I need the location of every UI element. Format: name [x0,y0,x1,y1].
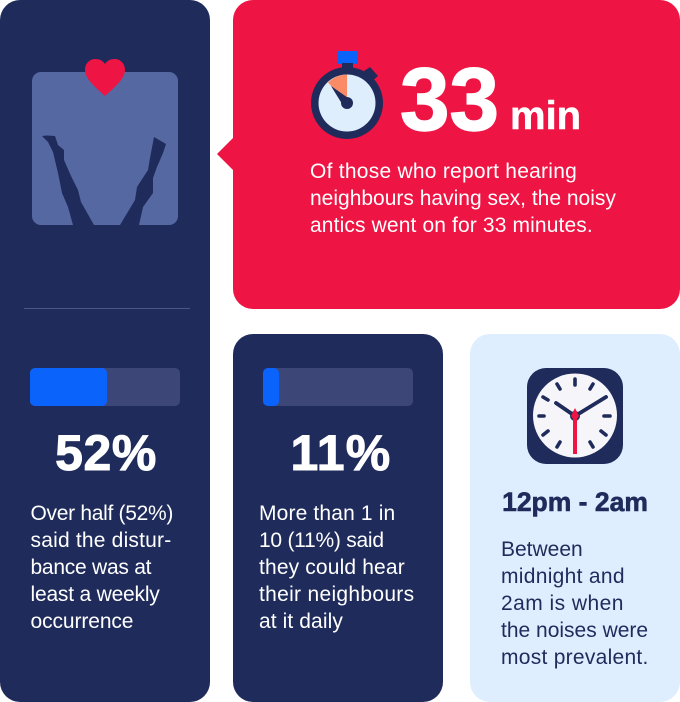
text: time description: the noises were [501,619,648,642]
panel: light blue card [470,334,680,702]
text: weekly occurrence [30,502,173,633]
panel: red callout [217,0,680,309]
text: callout description: Of those who report hearing [310,160,577,183]
text: weekly occurrence: said the distur- [30,529,171,552]
text: time description: 2am is when [501,592,624,615]
icon: stopwatch [311,51,383,139]
heading: time range: 12pm - 2am [502,487,648,517]
text: daily [259,502,414,633]
text: time description: Between [501,538,583,561]
text: callout description: neighbours having sex, the noisy [310,187,616,210]
stat 52%: 52% [55,425,157,481]
icon: heart [85,59,125,96]
text: daily: their neighbours [259,583,414,606]
progress bar 52% [30,368,180,406]
text: weekly occurrence: Over half (52%) [30,502,173,525]
text: callout description: antics went on for 33 minutes. [310,214,593,237]
text: daily: 10 (11%) said [259,529,384,552]
panel: red callout: min [510,94,581,138]
text: weekly occurrence: occurrence [30,610,133,633]
stat 11%: 11% [291,425,391,481]
text: time description: most prevalent. [501,646,649,669]
divider [24,308,190,309]
text: daily: More than 1 in [259,502,395,525]
text: daily: at it daily [259,610,343,633]
text: daily: they could hear [259,556,405,579]
text: weekly occurrence: least a weekly [30,583,160,606]
text: callout description [310,160,616,237]
panel: middle navy card [233,334,443,702]
progress bar 11% [263,368,413,406]
text: time description [501,538,649,669]
icon: clock [527,368,623,464]
illustration: legs and heart [32,59,178,225]
text: time description: midnight and [501,565,625,588]
panel: left navy column [0,0,210,702]
text: weekly occurrence: bance was at [30,556,151,579]
stat: 33 min: 33 [400,49,499,149]
